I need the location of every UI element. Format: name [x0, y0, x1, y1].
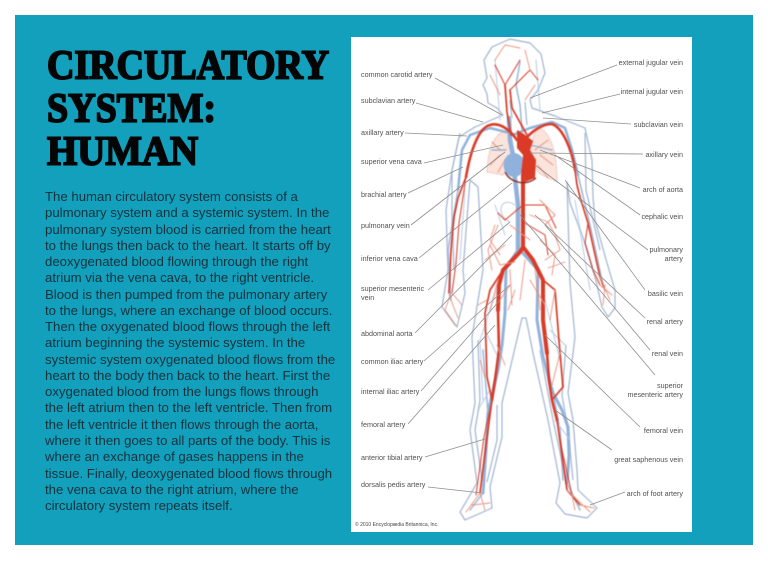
- body text: The human circulatory system consists of a: [45, 189, 298, 204]
- diagram labels: mesenteric artery: [627, 390, 683, 399]
- diagram labels: arch of aorta: [643, 185, 683, 194]
- diagram labels: superior vena cava: [361, 157, 422, 166]
- body text: pulmonary system blood is carried from the heart: [45, 222, 331, 237]
- diagram labels: dorsalis pedis artery: [361, 480, 426, 489]
- diagram labels: renal vein: [652, 349, 683, 358]
- body text: where an exchange of gases happens in the: [45, 449, 304, 464]
- title: CIRCULATORY: [47, 42, 329, 88]
- body text: pulmonary system and a systemic system. In the: [45, 205, 329, 220]
- arteries: [445, 45, 612, 512]
- diagram labels: anterior tibial artery: [361, 453, 423, 462]
- diagram labels: subclavian artery: [361, 96, 416, 105]
- body text: oxygenated blood from the lungs flows through: [45, 384, 318, 399]
- veins: [448, 60, 603, 510]
- body text: Blood is then pumped from the pulmonary artery: [45, 287, 327, 302]
- body text: [45, 189, 335, 513]
- diagram labels: brachial artery: [361, 190, 407, 199]
- body text: the left ventricle it then flows through the aorta,: [45, 417, 318, 432]
- body text: the left atrium then to the left ventricle. Then from: [45, 400, 332, 415]
- diagram labels: pulmonary: [649, 245, 683, 254]
- diagram labels: basilic vein: [648, 289, 683, 298]
- diagram labels: arch of foot artery: [627, 489, 683, 498]
- diagram labels: [361, 58, 684, 498]
- body text: circulatory system repeats itself.: [45, 498, 233, 513]
- diagram labels: great saphenous vein: [614, 455, 683, 464]
- diagram labels: subclavian vein: [634, 120, 683, 129]
- body text: to the lungs then back to the heart. It starts off by: [45, 238, 331, 253]
- body text: Then the oxygenated blood flows through the left: [45, 319, 330, 334]
- body text: atrium beginning the systemic system. In the: [45, 335, 305, 350]
- diagram labels: internal jugular vein: [621, 87, 683, 96]
- diagram labels: internal iliac artery: [361, 387, 420, 396]
- diagram labels: superior mesenteric: [361, 284, 425, 293]
- body text: atrium via the vena cava, to the right ventricle.: [45, 270, 314, 285]
- heart: [504, 130, 536, 183]
- title: HUMAN: [47, 128, 198, 174]
- title: SYSTEM:: [47, 84, 216, 130]
- diagram labels: abdominal aorta: [361, 329, 413, 338]
- body outline: [442, 39, 615, 520]
- body text: heart to the body then back to the heart. First the: [45, 368, 330, 383]
- title: [46, 42, 330, 174]
- body text: to the lungs, where an exchange of blood occurs.: [45, 303, 332, 318]
- body text: systemic system oxygenated blood flows from the: [45, 352, 335, 367]
- body text: where it then goes to all parts of the body. This is: [45, 433, 330, 448]
- diagram labels: renal artery: [647, 317, 683, 326]
- copyright: © 2010 Encyclopædia Britannica, Inc.: [355, 521, 438, 528]
- diagram labels: cephalic vein: [641, 212, 683, 221]
- diagram labels: vein: [361, 293, 374, 302]
- diagram labels: superior: [657, 381, 684, 390]
- lungs: [487, 127, 557, 182]
- body text: deoxygenated blood flowing through the right: [45, 254, 308, 269]
- diagram labels: axillary artery: [361, 128, 404, 137]
- diagram labels: artery: [665, 254, 683, 263]
- diagram labels: common iliac artery: [361, 357, 424, 366]
- diagram labels: inferior vena cava: [361, 254, 418, 263]
- body text: tissue. Finally, deoxygenated blood flows through: [45, 466, 332, 481]
- diagram labels: pulmonary vein: [361, 221, 410, 230]
- body text: the vena cava to the right atrium, where the: [45, 482, 299, 497]
- diagram labels: external jugular vein: [619, 58, 683, 67]
- diagram labels: common carotid artery: [361, 70, 433, 79]
- diagram labels: axillary vein: [645, 150, 683, 159]
- leader lines: [405, 65, 655, 505]
- diagram labels: femoral vein: [644, 426, 683, 435]
- diagram labels: femoral artery: [361, 420, 406, 429]
